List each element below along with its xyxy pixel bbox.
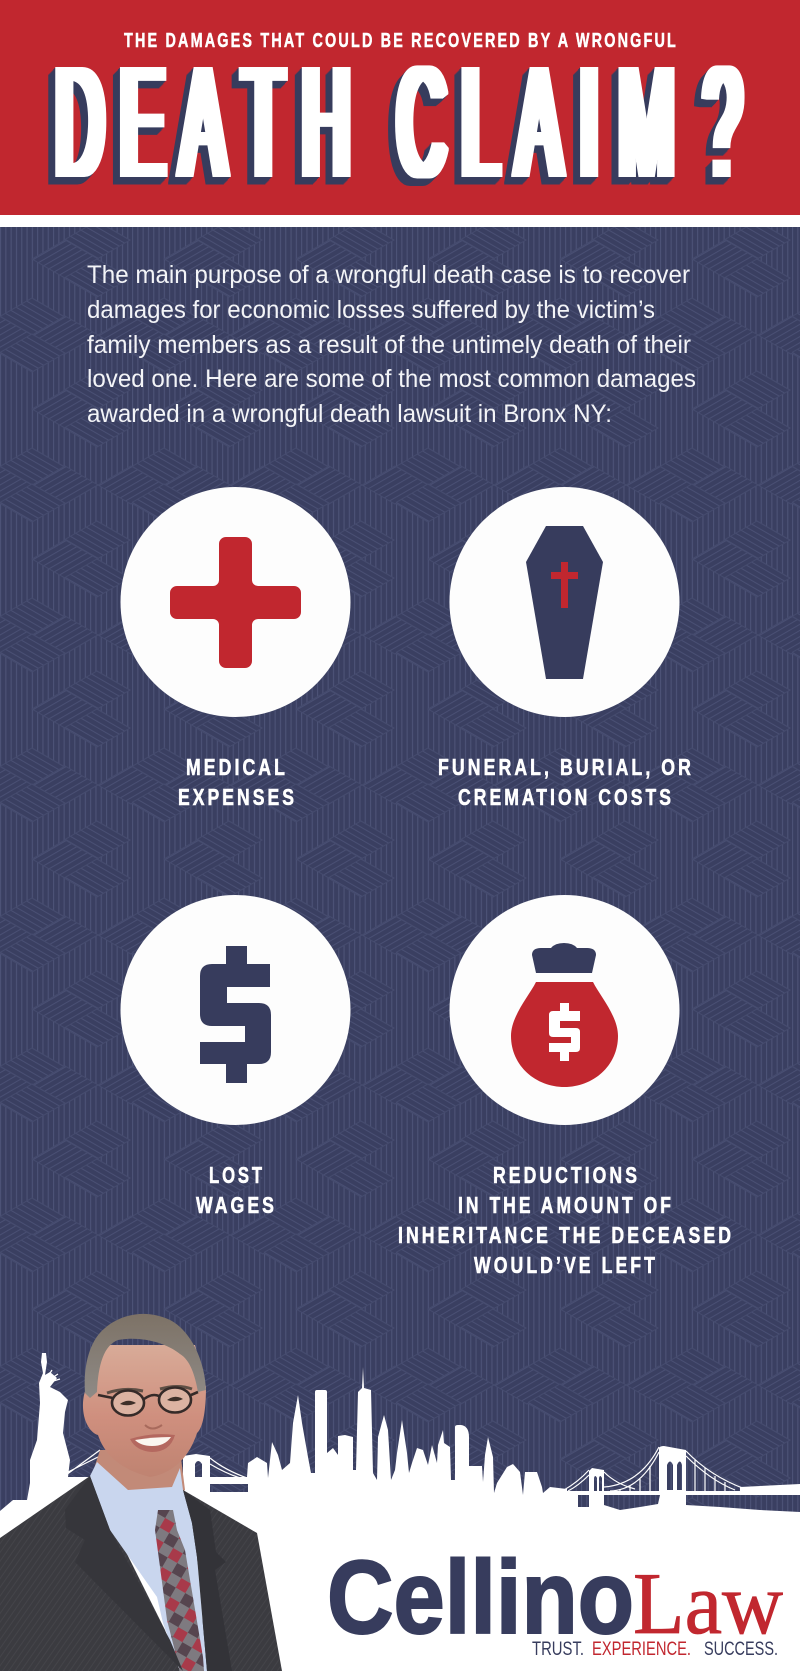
portrait: attorney (0, 1314, 282, 1671)
tagline: trust: TRUST. (532, 1639, 584, 1660)
teeth (135, 1437, 171, 1446)
suit jacket (0, 1476, 282, 1671)
intro paragraph: awarded in a wrongful death lawsuit in Bronx NY: (87, 400, 612, 428)
bridge deck right (567, 1484, 800, 1495)
panel: medical expenses (120, 487, 350, 810)
red banner (0, 0, 800, 215)
label line 2: WAGES (196, 1192, 277, 1218)
shirt (90, 1462, 207, 1671)
head (83, 1345, 206, 1477)
icon: coffin cross (551, 562, 578, 608)
glasses lenses (112, 1388, 191, 1416)
hair (85, 1314, 206, 1398)
left bridge tower arch (195, 1461, 202, 1477)
panel: funeral costs (438, 487, 694, 810)
label: FUNERAL, BURIAL, OR (438, 754, 694, 780)
label line 2: IN THE AMOUNT OF (458, 1192, 674, 1218)
label: LOST (209, 1162, 265, 1188)
bridge cables (62, 1447, 745, 1491)
wordmark Law: Law (633, 1556, 783, 1653)
icon: money bag (511, 982, 618, 1087)
glasses arms (98, 1392, 198, 1399)
eyes (120, 1397, 183, 1405)
right lapel (183, 1490, 232, 1671)
statue of liberty crown rays (47, 1370, 60, 1382)
intro paragraph: loved one. Here are some of the most common damages (87, 365, 696, 393)
left lapel (65, 1476, 183, 1671)
icon circle (450, 895, 680, 1125)
intro paragraph: damages for economic losses suffered by the victim’s (87, 296, 655, 324)
wordmark Cellino: Cellino (327, 1540, 634, 1656)
title: death claim: DEATH (56, 34, 350, 210)
icon circle (450, 487, 680, 717)
title: death claim (56, 34, 741, 210)
icon circle (120, 895, 350, 1125)
tagline: experience: EXPERIENCE. (592, 1639, 691, 1660)
label line 4: WOULD’VE LEFT (474, 1252, 658, 1278)
nose shadow (145, 1425, 162, 1428)
skyline and ground (0, 1353, 800, 1671)
white divider strip (0, 215, 800, 227)
panel: lost wages (120, 895, 350, 1218)
eyebrows (107, 1386, 192, 1393)
intro paragraph: The main purpose of a wrongful death case is to recover (87, 261, 690, 289)
title: death claim: CLAIM? (398, 34, 741, 210)
icon: coffin (526, 526, 603, 679)
label line 2: CREMATION COSTS (458, 784, 674, 810)
label: REDUCTIONS (493, 1162, 640, 1188)
icon: medical cross (170, 537, 301, 668)
panel: reductions in inheritance (398, 895, 734, 1278)
mouth (130, 1434, 175, 1452)
icon: dollar sign (200, 946, 271, 1083)
left bridge window (210, 1484, 248, 1492)
intro paragraph: family members as a result of the untimely death of their (87, 331, 691, 359)
tie (155, 1510, 204, 1671)
label line 2: EXPENSES (178, 784, 297, 810)
label: MEDICAL (186, 754, 288, 780)
large bridge tower (659, 1446, 686, 1495)
header band (0, 0, 800, 227)
tagline: success: SUCCESS. (704, 1639, 778, 1660)
city skyline silhouette (0, 1353, 800, 1671)
icon: bag dollar sign (549, 1003, 580, 1061)
icon circle (120, 487, 350, 717)
logo: Cellino Law (327, 1540, 783, 1660)
intro paragraph (87, 261, 696, 428)
icon: money bag knot (532, 943, 596, 973)
neck (92, 1450, 185, 1500)
small bridge tower (589, 1468, 604, 1495)
